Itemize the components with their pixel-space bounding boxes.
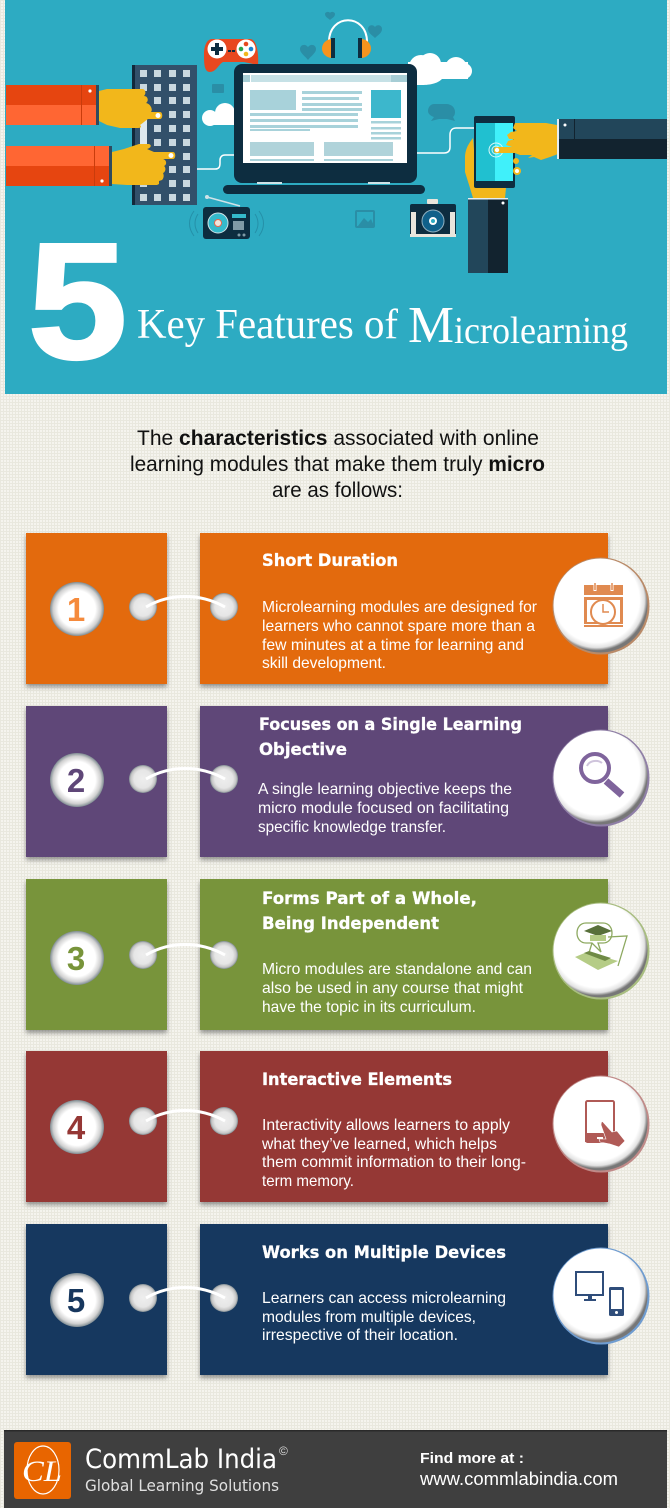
icon: faded hearts and media glyphs — [212, 12, 455, 227]
body text: Interactivity allows learners to apply — [262, 1117, 510, 1134]
right hand holding phone with sleeve — [465, 138, 508, 273]
body text: also be used in any course that might — [262, 980, 524, 997]
icon: right cloud — [408, 53, 472, 85]
icon: CommLab logo: CL — [22, 1455, 62, 1488]
heading — [262, 889, 477, 934]
panel: feature 5 multiple devices: 5 — [67, 1282, 85, 1319]
brand name: CommLab India — [85, 1444, 277, 1475]
panel: feature 3 part of a whole — [26, 879, 650, 1030]
intro text: learning modules that make them truly micro — [130, 453, 545, 476]
body text — [262, 599, 538, 672]
body text: term memory. — [262, 1173, 354, 1190]
heading: Works on Multiple Devices — [262, 1243, 506, 1263]
body text: Microlearning modules are designed for — [262, 599, 538, 616]
heading: Objective — [259, 740, 347, 760]
panel: feature 2 single objective: 2 — [67, 762, 85, 799]
body text — [262, 961, 532, 1016]
body text: skill development. — [262, 655, 386, 672]
panel: feature 1 short duration: 1 — [67, 591, 85, 628]
heading: Forms Part of a Whole, — [262, 889, 477, 909]
title: icrolearning — [454, 310, 628, 352]
panel: feature 2 single objective — [26, 706, 650, 857]
body text: have the topic in its curriculum. — [262, 999, 476, 1016]
body text — [258, 781, 512, 836]
body text: what they’ve learned, which helps — [261, 1136, 497, 1153]
icon: calendar clock — [552, 558, 650, 654]
icon: magnifying glass — [552, 730, 650, 826]
title: M — [408, 297, 454, 354]
intro text: The characteristics associated with online — [137, 427, 539, 450]
big numeral 5: 5 — [28, 210, 127, 394]
heading — [259, 715, 522, 760]
icon: desktop and phone — [552, 1248, 650, 1344]
left arm bottom — [6, 144, 175, 186]
body text: modules from multiple devices, — [262, 1309, 476, 1326]
intro text: are as follows: — [272, 479, 403, 502]
icon: smartphone — [474, 116, 515, 188]
panel: feature 4 interactive elements — [26, 1051, 650, 1202]
body text: irrespective of their location. — [262, 1327, 458, 1344]
body text: learners who cannot spare more than a — [262, 618, 535, 635]
icon: radio — [190, 195, 264, 239]
copyright mark: © — [279, 1444, 288, 1458]
body text: them commit information to their long- — [262, 1154, 526, 1171]
icon: keyboard — [132, 65, 197, 205]
title: Key Features of — [137, 302, 398, 348]
heading: Interactive Elements — [262, 1070, 452, 1090]
icon: game controller — [204, 39, 258, 72]
icon: camera — [410, 199, 456, 237]
header banner — [5, 0, 667, 394]
title — [137, 297, 628, 354]
body text: Micro modules are standalone and can — [262, 961, 532, 978]
left arm top — [6, 85, 162, 128]
website url: www.commlabindia.com — [419, 1469, 618, 1489]
heading: Being Independent — [262, 914, 439, 934]
icon: laptop — [223, 64, 425, 194]
body text: micro module focused on facilitating — [258, 800, 509, 817]
body text — [261, 1117, 526, 1190]
panel: feature 5 multiple devices — [26, 1224, 650, 1375]
footer — [4, 1430, 667, 1508]
icon: left cloud — [202, 103, 240, 126]
body text — [262, 1290, 506, 1344]
heading: Focuses on a Single Learning — [259, 715, 522, 735]
intro text — [130, 427, 545, 502]
connector cables — [197, 128, 474, 169]
body text: few minutes at a time for learning and — [262, 637, 524, 654]
icon: laptop with graduation cap — [552, 902, 650, 1000]
panel: feature 4 interactive elements: 4 — [67, 1109, 86, 1146]
find more label: Find more at : — [420, 1450, 524, 1467]
body text: Learners can access microlearning — [262, 1290, 506, 1307]
panel: feature 1 short duration — [26, 533, 650, 684]
icon: headphones — [322, 20, 371, 58]
body text: A single learning objective keeps the — [258, 781, 512, 798]
body text: specific knowledge transfer. — [258, 819, 446, 836]
icon: CommLab logo — [14, 1442, 71, 1499]
panel: feature 3 part of a whole: 3 — [67, 940, 85, 977]
right arm pointing — [494, 119, 667, 175]
tagline: Global Learning Solutions — [85, 1476, 279, 1495]
heading: Short Duration — [262, 551, 398, 571]
icon: tablet with touching hand — [552, 1076, 650, 1172]
